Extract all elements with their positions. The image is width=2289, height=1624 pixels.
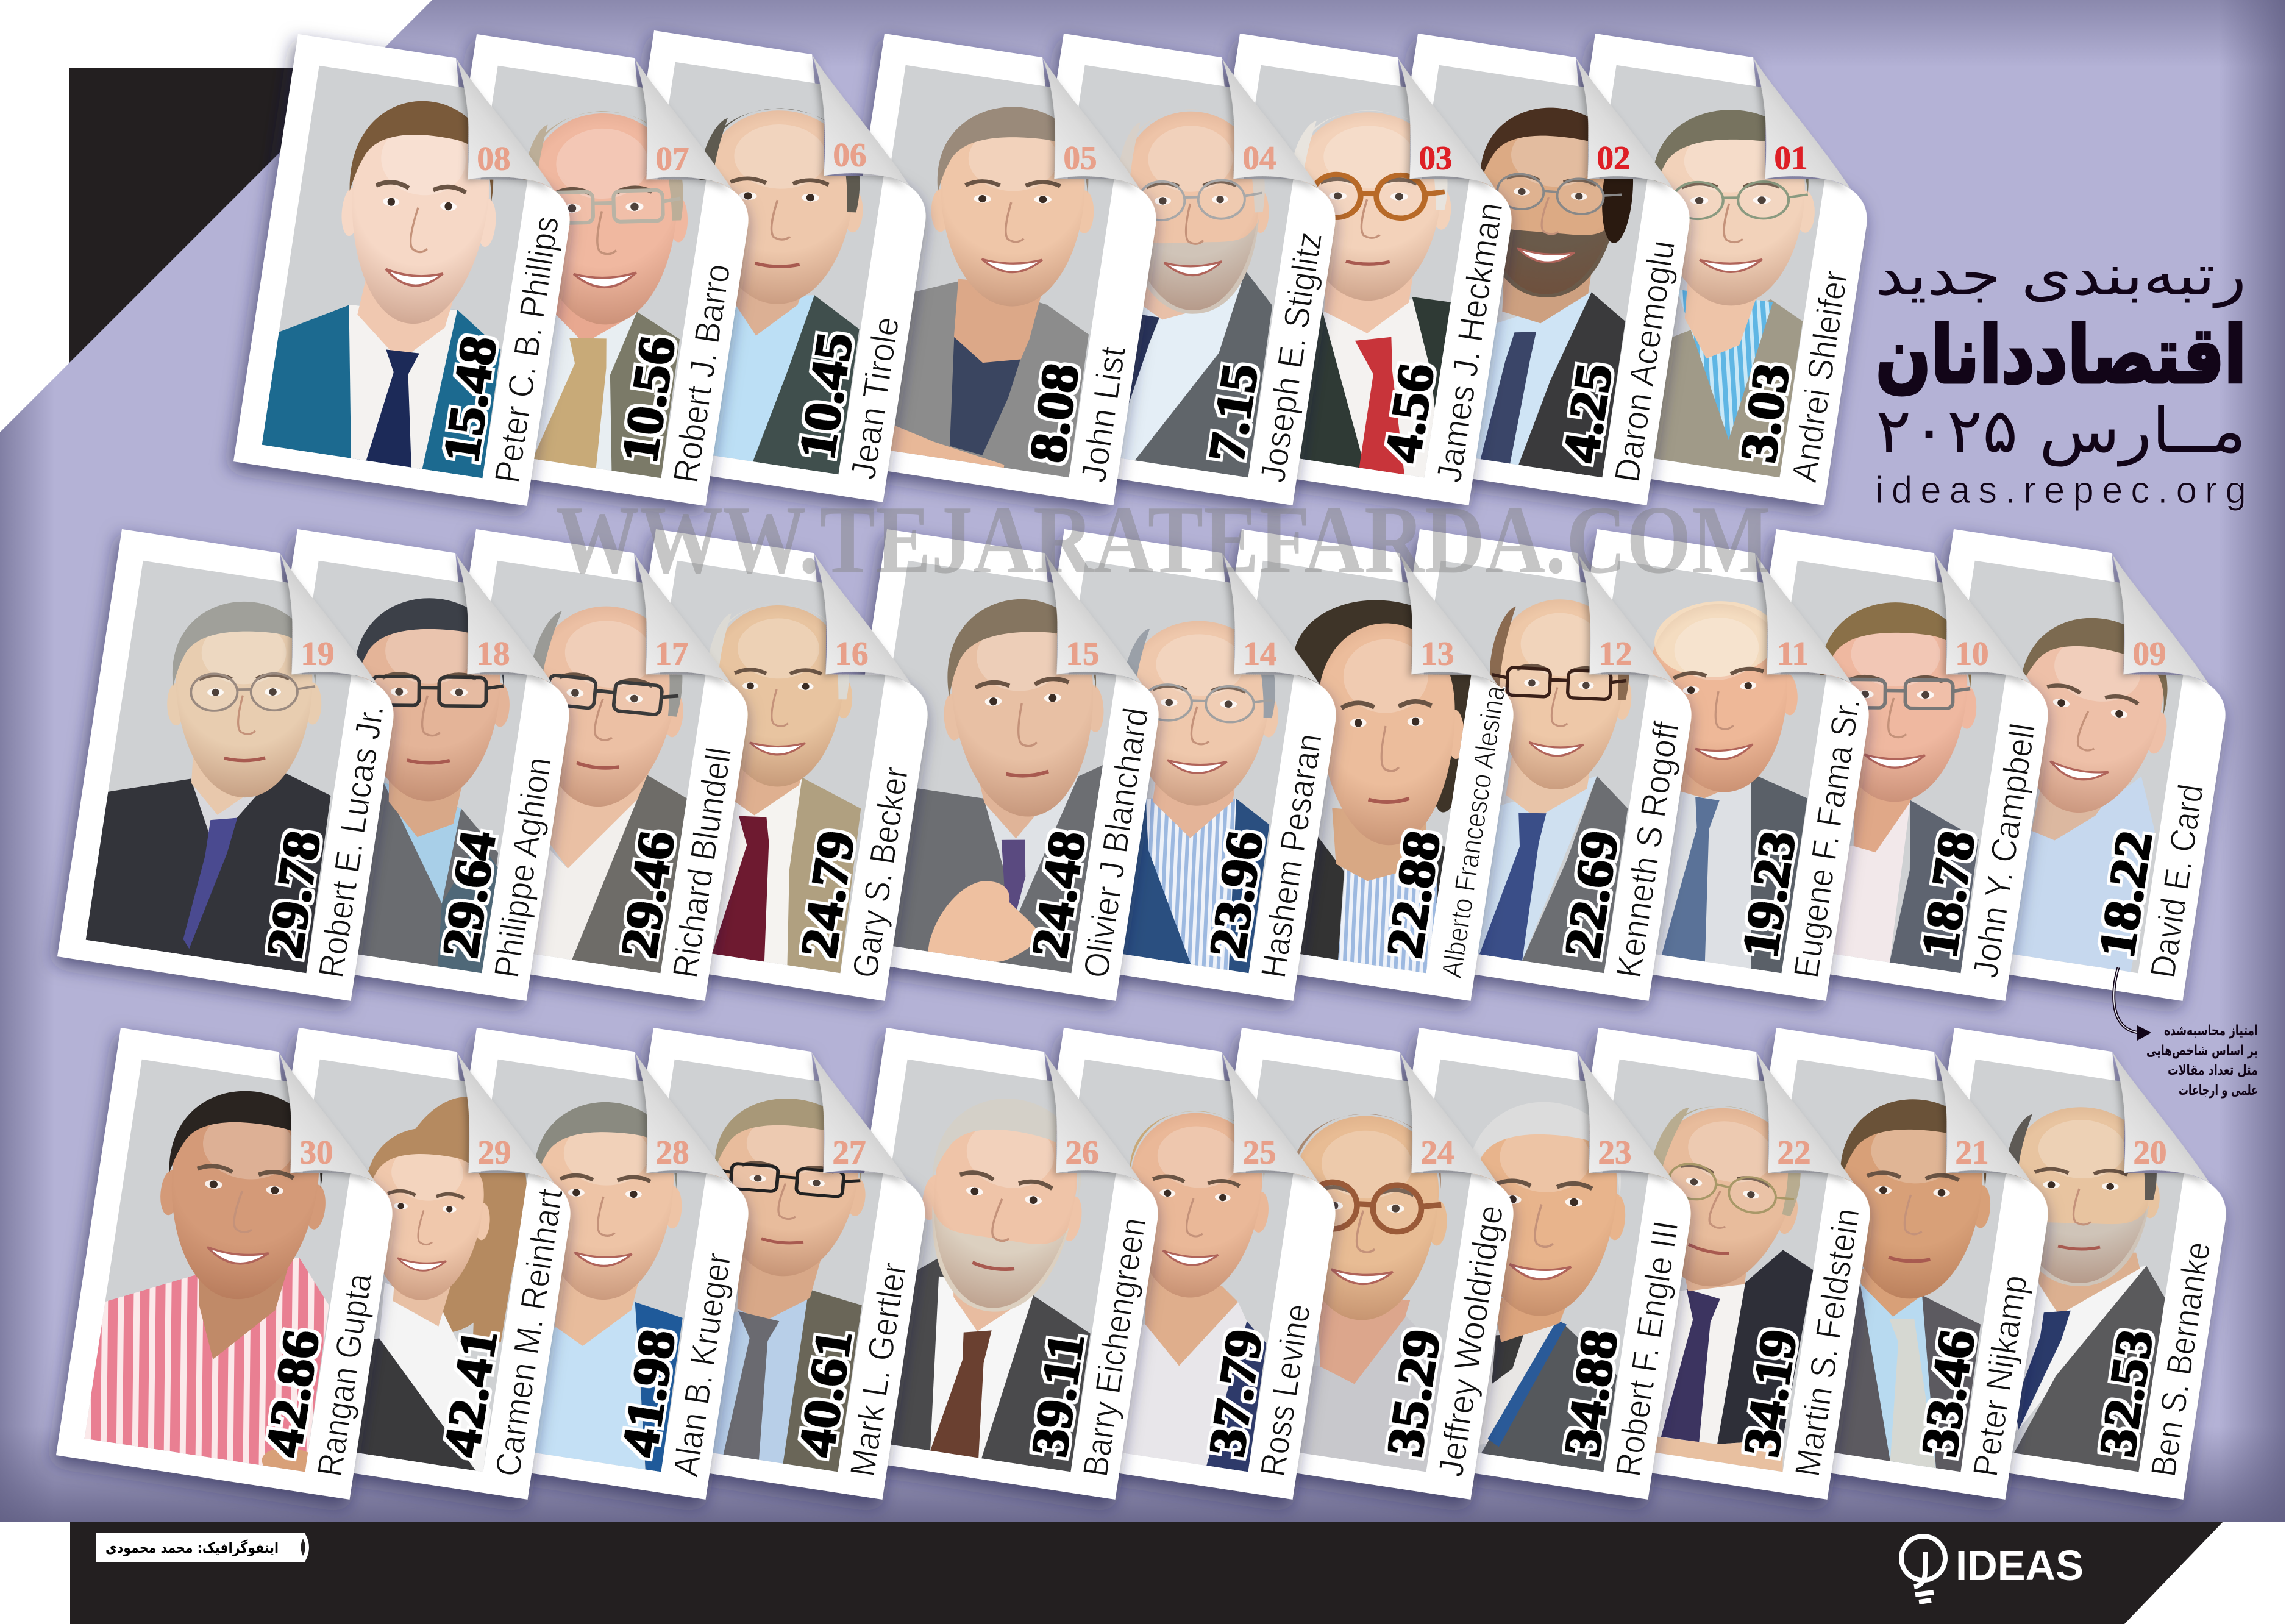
rank number: 01 <box>1775 139 1808 176</box>
score: 24.79 <box>790 827 866 962</box>
name: Alan B. Krueger <box>666 1250 739 1479</box>
name: Gary S. Becker <box>845 764 916 980</box>
portrait <box>1953 1086 2193 1472</box>
row 3 of cards: ranks 20 to 30 <box>56 1028 2248 1500</box>
score: 18.78 <box>1910 827 1986 962</box>
card base <box>1712 529 2070 1001</box>
rank number: 21 <box>1956 1133 1989 1170</box>
rank number: 30 <box>300 1133 333 1170</box>
card base <box>589 30 948 502</box>
portrait <box>1428 91 1657 477</box>
row 2 of cards: ranks 09 to 19 <box>57 529 2248 1001</box>
portrait <box>1236 1093 1479 1472</box>
score: 29.64 <box>432 827 507 962</box>
name: Rangan Gupta <box>310 1270 380 1479</box>
portrait <box>861 1084 1125 1472</box>
score: 34.19 <box>1732 1326 1808 1461</box>
name: Olivier J Blanchard <box>1076 705 1156 980</box>
rank number: 02 <box>1597 139 1631 176</box>
note line 3: مثل تعداد مقالات <box>2168 1063 2258 1078</box>
name: Richard Blundell <box>665 745 739 980</box>
score: 29.78 <box>256 827 332 962</box>
page curl <box>1382 1052 1515 1186</box>
name: Jeffrey Wooldridge <box>1431 1203 1511 1479</box>
source url: ideas.repec.org <box>1875 469 2246 511</box>
name: Robert F. Engle III <box>1608 1218 1686 1479</box>
rank number: 14 <box>1244 635 1277 672</box>
name: John List <box>1073 344 1133 485</box>
name: Ben S. Bernanke <box>2143 1239 2218 1479</box>
rank number: 11 <box>1777 635 1809 672</box>
score: 22.88 <box>1376 827 1451 962</box>
name: David E. Card <box>2143 782 2211 980</box>
note line 1: امتیاز محاسبه‌شده <box>2164 1023 2258 1039</box>
portrait <box>1236 87 1481 478</box>
page curl <box>438 58 571 193</box>
portrait <box>1585 573 1837 973</box>
portrait <box>1061 85 1303 477</box>
card base <box>412 1028 771 1500</box>
page curl <box>1559 1052 1692 1186</box>
page curl <box>794 54 927 189</box>
name: Philippe Aghion <box>486 755 559 980</box>
score: 32.53 <box>2088 1326 2164 1461</box>
card 02 Daron Acemoglu <box>1398 30 1699 522</box>
name: John Y. Campbell <box>1965 721 2043 980</box>
card base <box>1712 1028 2070 1500</box>
card base <box>999 34 1358 505</box>
card base <box>1000 529 1358 1001</box>
name: Mark L. Gertler <box>842 1260 914 1479</box>
rank number: 07 <box>656 140 689 177</box>
score: 19.23 <box>1731 827 1807 962</box>
page curl <box>617 58 750 193</box>
card 17 Richard Blundell <box>411 529 770 1001</box>
portrait <box>1072 599 1303 974</box>
card 14 Hashem Pesaran <box>1000 529 1358 1001</box>
page curl <box>1560 553 1693 688</box>
card base <box>1531 34 1889 505</box>
top black corner panel <box>69 68 366 364</box>
rank number: 03 <box>1419 139 1453 176</box>
score: 23.96 <box>1198 827 1274 962</box>
score: 10.45 <box>788 329 864 463</box>
page curl <box>1558 57 1691 192</box>
wordmark: IDEAS <box>1956 1542 2084 1589</box>
score: 4.25 <box>1552 360 1623 466</box>
page curl <box>1027 553 1160 688</box>
card 08 Peter C. B. Phillips <box>233 34 592 506</box>
card base <box>1890 1028 2248 1500</box>
rank number: 23 <box>1598 1133 1632 1170</box>
card base <box>1533 529 1891 1001</box>
score: 34.88 <box>1553 1326 1629 1461</box>
page curl <box>1205 553 1337 688</box>
score: 10.56 <box>611 332 686 467</box>
page curl <box>438 553 571 688</box>
watermark: WWW.TEJARATEFARDA.COM <box>556 485 1770 594</box>
portrait <box>1785 1080 2016 1472</box>
card 23 Robert F. Engle III <box>1355 1028 1713 1500</box>
name: Jean Tirole <box>843 315 907 482</box>
name: Robert J. Barro <box>666 262 738 485</box>
rank number: 28 <box>656 1133 689 1170</box>
rank number: 06 <box>833 136 867 173</box>
portrait <box>1413 1081 1658 1472</box>
portrait <box>661 1081 893 1472</box>
page curl <box>1739 1052 1871 1186</box>
card base <box>822 529 1181 1001</box>
portrait <box>848 79 1124 480</box>
page curl <box>2094 553 2227 688</box>
card base <box>1355 529 1714 1001</box>
name: Hashem Pesaran <box>1253 731 1330 980</box>
card base <box>57 529 416 1001</box>
portrait <box>653 582 895 973</box>
page curl <box>1380 57 1513 192</box>
card 30 Rangan Gupta <box>56 1028 415 1500</box>
icon: light bulb <box>1901 1536 1945 1602</box>
score: 18.22 <box>2088 827 2163 962</box>
page curl <box>1735 57 1868 192</box>
page curl <box>794 1052 927 1186</box>
portrait <box>1652 110 1815 478</box>
page curl <box>1917 1052 2049 1186</box>
portrait <box>1250 588 1501 977</box>
page curl <box>1204 1052 1337 1186</box>
page curl <box>1737 553 1870 688</box>
card 19 Robert E. Lucas Jr. <box>57 529 416 1001</box>
card base <box>591 529 950 1001</box>
rank number: 04 <box>1243 139 1276 176</box>
score note <box>2146 1023 2258 1099</box>
name: Peter Nijkamp <box>1965 1272 2035 1479</box>
card 29 Carmen M. Reinhart <box>234 1028 593 1500</box>
card 22 Martin S. Feldstein <box>1534 1028 1892 1500</box>
page curl <box>261 1052 394 1186</box>
card 13 Alberto Francesco Alesina <box>1177 529 1536 1001</box>
rank number: 10 <box>1956 635 1989 672</box>
card base <box>999 1028 1358 1500</box>
card base <box>1177 529 1536 1001</box>
score: 15.48 <box>432 332 508 467</box>
page curl <box>796 553 929 688</box>
rank number: 13 <box>1421 635 1454 672</box>
score: 40.61 <box>788 1326 863 1461</box>
card 21 Peter Nijkamp <box>1712 1028 2070 1500</box>
portrait <box>482 591 714 973</box>
card 09 David E. Card <box>1889 529 2248 1001</box>
rank number: 09 <box>2133 635 2166 672</box>
name: Barry Eichengreen <box>1075 1215 1154 1479</box>
rank number: 15 <box>1066 635 1100 672</box>
rank number: 08 <box>477 140 511 177</box>
rank number: 19 <box>301 635 335 672</box>
page curl <box>262 553 395 688</box>
portrait <box>646 86 893 474</box>
score: 42.41 <box>433 1326 508 1461</box>
page curl <box>1917 553 2049 688</box>
page curl <box>616 553 749 688</box>
card 12 Kenneth S Rogoff <box>1355 529 1714 1001</box>
rank number: 24 <box>1421 1133 1454 1170</box>
rank number: 20 <box>2134 1133 2167 1170</box>
name: Carmen M. Reinhart <box>488 1186 571 1479</box>
rank number: 18 <box>477 635 510 672</box>
page curl <box>1025 57 1158 192</box>
score: 42.86 <box>255 1326 330 1461</box>
card base <box>589 1028 947 1500</box>
score: 35.29 <box>1376 1326 1451 1461</box>
credit badge: اینفوگرافیک: محمد محمودی <box>105 1539 279 1556</box>
rank number: 29 <box>478 1133 511 1170</box>
page curl <box>1027 1052 1159 1186</box>
rank number: 26 <box>1066 1133 1099 1170</box>
card base <box>56 1028 415 1500</box>
card 28 Alan B. Krueger <box>412 1028 771 1500</box>
card 24 Jeffrey Wooldridge <box>1177 1028 1536 1500</box>
page curl <box>1204 57 1337 192</box>
card 25 Ross Levine <box>999 1028 1358 1500</box>
title line 3: مــارس ۲۰۲۵ <box>1876 395 2246 466</box>
portrait <box>1437 581 1659 973</box>
card base <box>1175 34 1534 505</box>
page curl <box>2095 1052 2227 1186</box>
card 10 John Y. Campbell <box>1712 529 2070 1001</box>
score: 22.69 <box>1554 827 1629 962</box>
portrait <box>261 79 538 478</box>
name: Robert E. Lucas Jr. <box>311 702 391 980</box>
card 20 Ben S. Bernanke <box>1890 1028 2248 1500</box>
rank number: 22 <box>1778 1133 1811 1170</box>
score: 4.56 <box>1374 360 1445 466</box>
score: 29.46 <box>610 827 686 962</box>
portrait <box>1076 1095 1301 1472</box>
credit badge <box>96 1533 309 1562</box>
name: Alberto Francesco Alesina <box>1435 683 1511 980</box>
score: 41.98 <box>611 1326 686 1461</box>
card 06 Jean Tirole <box>589 30 948 502</box>
rank number: 25 <box>1243 1133 1276 1170</box>
name: Kenneth S Rogoff <box>1609 719 1687 980</box>
name: Eugene F. Fama Sr. <box>1786 696 1868 980</box>
portrait <box>466 84 722 479</box>
score: 3.03 <box>1729 360 1801 466</box>
name: Joseph E. Stiglitz <box>1253 229 1330 485</box>
page curl <box>617 1052 750 1186</box>
portrait <box>1764 579 2016 973</box>
portrait <box>861 568 1142 975</box>
portrait <box>1598 1089 1836 1472</box>
page curl <box>439 1052 572 1186</box>
card 07 Robert J. Barro <box>412 34 771 506</box>
rank number: 27 <box>833 1133 866 1170</box>
rank number: 12 <box>1599 635 1632 672</box>
card base <box>233 34 592 506</box>
rank number: 16 <box>835 635 869 672</box>
portrait <box>1970 604 2185 972</box>
name: Andrei Shleifer <box>1784 268 1856 485</box>
IDEAS logo <box>1901 1536 2084 1602</box>
score: 7.15 <box>1198 360 1269 466</box>
score: 37.79 <box>1198 1326 1273 1461</box>
card 27 Mark L. Gertler <box>589 1028 947 1500</box>
card base <box>822 1028 1180 1500</box>
row 1 of cards: ranks 01 to 08 <box>233 30 1889 506</box>
arrow from score to note <box>2114 967 2151 1041</box>
title block <box>1875 243 2246 511</box>
card 03 James J. Heckman <box>1175 34 1534 505</box>
card 26 Barry Eichengreen <box>822 1028 1180 1500</box>
card base <box>1889 529 2248 1001</box>
name: Ross Levine <box>1253 1302 1318 1479</box>
name: Peter C. B. Phillips <box>487 214 566 485</box>
card 05 John List <box>820 34 1178 505</box>
page curl <box>1382 553 1515 688</box>
rank number: 17 <box>655 635 689 672</box>
card base <box>1355 1028 1713 1500</box>
card 11 Eugene F. Fama Sr. <box>1533 529 1891 1001</box>
card base <box>1177 1028 1536 1500</box>
name: Martin S. Feldstein <box>1787 1206 1867 1479</box>
card base <box>1353 34 1712 505</box>
card base <box>412 34 771 506</box>
card 15 Olivier J Blanchard <box>822 529 1181 1001</box>
portrait <box>85 574 361 973</box>
rank number: 05 <box>1064 139 1097 176</box>
card base <box>234 1028 593 1500</box>
portrait <box>478 1081 716 1473</box>
card 18 Philippe Aghion <box>233 529 591 1001</box>
portrait <box>82 1070 377 1483</box>
score: 39.11 <box>1020 1329 1095 1461</box>
card base <box>1534 1028 1892 1500</box>
card base <box>233 529 591 1001</box>
card 16 Gary S. Becker <box>591 529 950 1001</box>
card base <box>820 34 1178 505</box>
card base <box>411 529 770 1001</box>
card 01 Andrei Shleifer <box>1576 30 1875 522</box>
portrait <box>297 575 539 974</box>
score: 24.48 <box>1021 827 1097 962</box>
name: James J. Heckman <box>1429 200 1511 485</box>
score: 33.46 <box>1910 1326 1986 1461</box>
title line 1: رتبه‌بندی جدید <box>1875 243 2246 308</box>
card 04 Joseph E. Stiglitz <box>999 34 1358 505</box>
bottom black footer band <box>70 1522 2223 1624</box>
score: 8.08 <box>1019 360 1090 466</box>
name: Daron Acemoglu <box>1607 238 1682 485</box>
portrait <box>316 1082 543 1472</box>
